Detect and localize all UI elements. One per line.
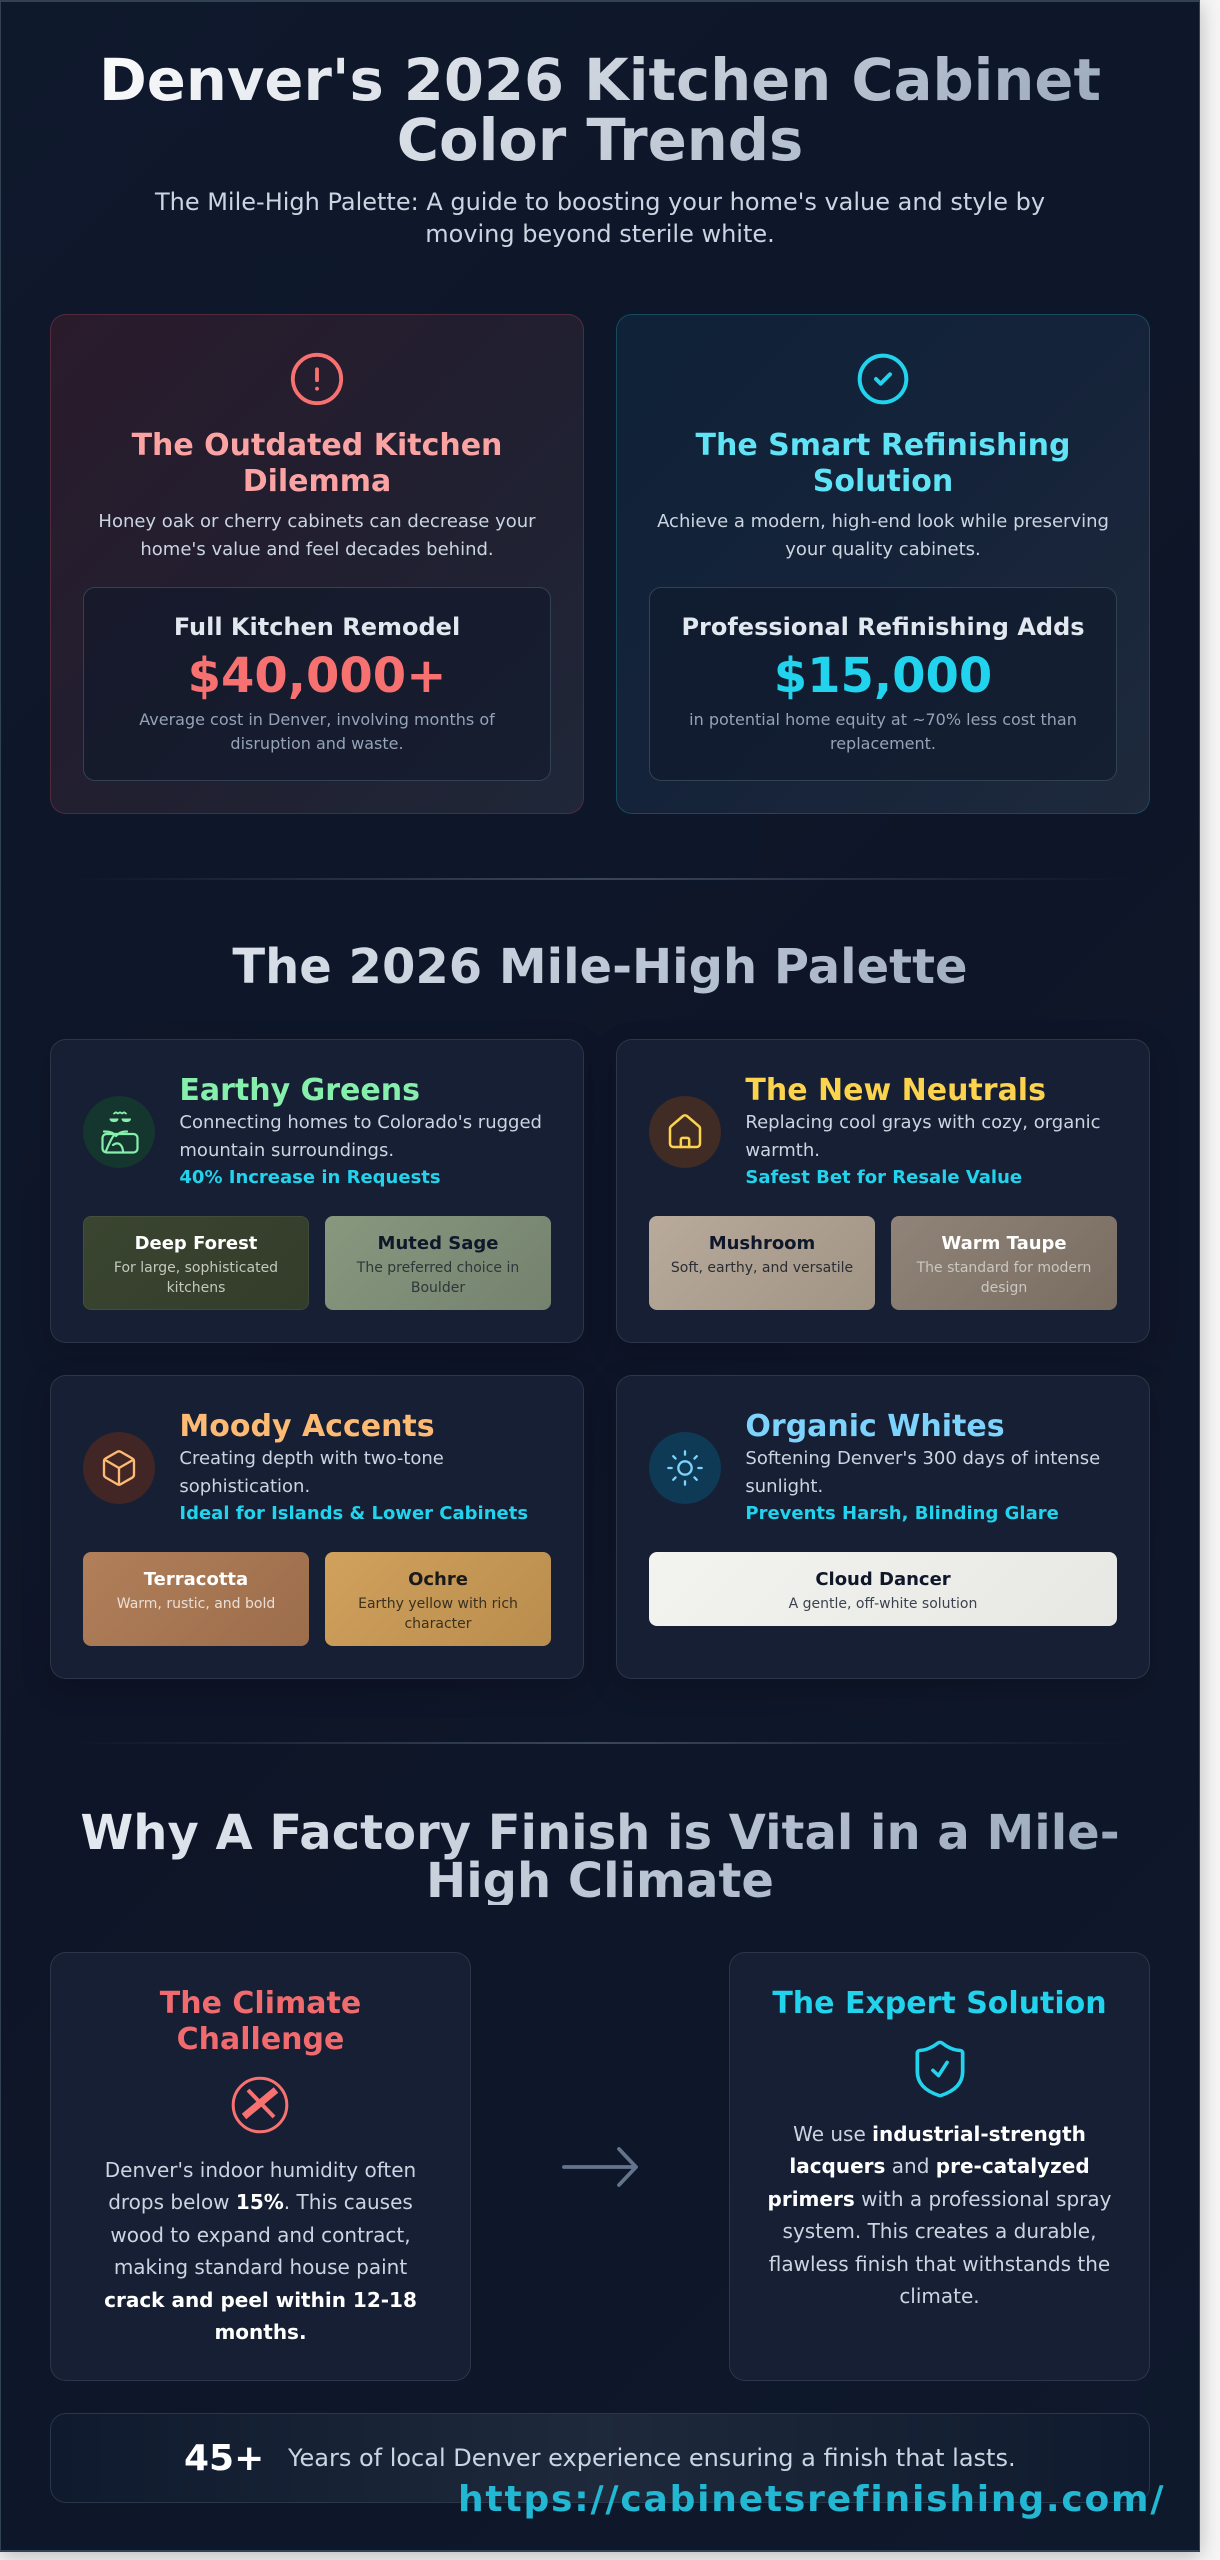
body text xyxy=(768,2122,1111,2308)
body text: primers with a professional spray xyxy=(768,2187,1111,2211)
heading: outdated kitchen: Dilemma xyxy=(243,464,391,498)
stat box: professional refinishing xyxy=(649,587,1117,781)
description xyxy=(179,1448,444,1496)
stat note xyxy=(689,710,1077,753)
heading: The Climate xyxy=(160,1986,361,2020)
panel: earthy greens xyxy=(50,1039,584,1343)
swatch note: Earthy yellow with rich xyxy=(358,1596,518,1612)
swatch: terracotta xyxy=(83,1552,309,1646)
description: outdated kitchen: Honey oak or cherry cabinets can decrease your xyxy=(98,511,536,532)
title: Denver's 2026 Kitchen Cabinet xyxy=(99,46,1101,114)
heading: smart refinishing: The Smart Refinishing xyxy=(696,428,1070,462)
description: Creating depth with two-tone xyxy=(179,1448,444,1468)
section heading: palette: The 2026 Mile-High Palette xyxy=(232,939,968,995)
description: sunlight. xyxy=(745,1476,823,1496)
swatch note xyxy=(356,1260,519,1296)
icon: shield check xyxy=(916,2040,964,2098)
body text: months. xyxy=(214,2320,307,2344)
body text: Denver's indoor humidity often xyxy=(105,2158,416,2182)
body text: lacquers and pre-catalyzed xyxy=(789,2154,1090,2178)
description xyxy=(179,1112,542,1160)
swatch: muted sage xyxy=(325,1216,551,1310)
swatch note: The preferred choice in xyxy=(357,1260,519,1276)
title: Color Trends xyxy=(397,106,803,174)
swatch note xyxy=(358,1596,518,1632)
title xyxy=(50,50,1150,170)
description: smart refinishing: Achieve a modern, high-end look while preserving xyxy=(657,511,1109,532)
stat note: replacement. xyxy=(830,734,936,753)
stat note: Average cost in Denver, involving months of xyxy=(139,710,495,729)
body text: drops below 15%. This causes xyxy=(108,2190,413,2214)
description: smart refinishing: your quality cabinets. xyxy=(785,539,981,560)
icon: crossed circle xyxy=(232,2076,288,2134)
heading: outdated kitchen: The Outdated Kitchen xyxy=(132,428,502,462)
body text xyxy=(104,2158,417,2344)
swatch note: Soft, earthy, and versatile xyxy=(671,1260,853,1276)
description: Softening Denver's 300 days of intense xyxy=(745,1448,1100,1468)
heading: Challenge xyxy=(177,2022,344,2056)
panel: climate challenge xyxy=(50,1952,471,2381)
swatch name: Deep Forest xyxy=(135,1233,257,1254)
panel: organic whites xyxy=(616,1375,1150,1679)
swatch note: For large, sophisticated xyxy=(114,1260,278,1276)
swatch note: kitchens xyxy=(167,1280,225,1296)
panel: new neutrals xyxy=(616,1039,1150,1343)
swatch note: A gentle, off-white solution xyxy=(789,1596,977,1612)
body text: climate. xyxy=(899,2284,980,2308)
subtitle xyxy=(154,188,1045,248)
description: outdated kitchen xyxy=(98,511,536,560)
stat number: 45+ xyxy=(184,2438,264,2478)
heading: The New Neutrals xyxy=(745,1072,1046,1108)
swatch note: design xyxy=(981,1280,1027,1296)
stat note: disruption and waste. xyxy=(230,734,404,753)
panel: moody accents xyxy=(50,1375,584,1679)
stat note xyxy=(139,710,496,753)
heading: Moody Accents xyxy=(179,1408,435,1444)
stat description: Years of local Denver experience ensuring a finish that lasts. xyxy=(288,2444,1016,2472)
swatch: cloud dancer xyxy=(649,1552,1117,1626)
swatch note: character xyxy=(404,1616,472,1632)
description: mountain surroundings. xyxy=(179,1140,394,1160)
description xyxy=(745,1112,1101,1160)
heading: smart refinishing: Solution xyxy=(813,464,953,498)
heading xyxy=(160,1986,361,2056)
swatch: deep forest xyxy=(83,1216,309,1310)
icon: house xyxy=(649,1096,721,1168)
arrow xyxy=(562,2147,638,2187)
swatch note: Boulder xyxy=(411,1280,465,1296)
stat note: in potential home equity at ~70% less cost than xyxy=(689,710,1077,729)
highlight: Safest Bet for Resale Value xyxy=(745,1167,1022,1188)
swatch note xyxy=(114,1260,278,1296)
swatch: ochre xyxy=(325,1552,551,1646)
stat value: $15,000 xyxy=(774,648,992,704)
section heading: factory finish: High Climate xyxy=(426,1853,774,1909)
body text: making standard house paint xyxy=(114,2255,407,2279)
heading: The Expert Solution xyxy=(772,1986,1107,2020)
swatch note: The standard for modern xyxy=(917,1260,1091,1276)
icon: alert circle xyxy=(290,352,344,406)
heading: smart refinishing xyxy=(696,428,1070,498)
swatch name: Ochre xyxy=(408,1569,468,1590)
highlight: Prevents Harsh, Blinding Glare xyxy=(745,1503,1059,1524)
body text: system. This creates a durable, xyxy=(783,2219,1096,2243)
description: Connecting homes to Colorado's rugged xyxy=(179,1112,542,1132)
swatch note: Warm, rustic, and bold xyxy=(117,1596,275,1612)
subtitle: The Mile-High Palette: A guide to boosting your home's value and style by xyxy=(155,188,1045,216)
description: smart refinishing xyxy=(657,511,1109,560)
description: sophistication. xyxy=(179,1476,310,1496)
highlight: Ideal for Islands & Lower Cabinets xyxy=(179,1503,528,1524)
stat box: full kitchen remodel xyxy=(83,587,551,781)
body text: wood to expand and contract, xyxy=(110,2223,411,2247)
body text: flawless finish that withstands the xyxy=(769,2252,1110,2276)
subtitle: moving beyond sterile white. xyxy=(425,220,775,248)
section heading: factory finish: Why A Factory Finish is Vital in a Mile- xyxy=(80,1805,1120,1861)
swatch: mushroom xyxy=(649,1216,875,1310)
stat value: $40,000+ xyxy=(188,648,446,704)
heading: Organic Whites xyxy=(745,1408,1005,1444)
website url: https://cabinetsrefinishing.com/ xyxy=(458,2479,1165,2520)
swatch name: Muted Sage xyxy=(378,1233,498,1254)
footer stat bar xyxy=(50,2413,1150,2503)
swatch name: Terracotta xyxy=(144,1569,248,1590)
section heading: factory finish xyxy=(50,1809,1150,1905)
description: outdated kitchen: home's value and feel decades behind. xyxy=(140,539,494,560)
body text: We use industrial-strength xyxy=(793,2122,1086,2146)
heading: outdated kitchen xyxy=(132,428,502,498)
icon: check circle xyxy=(858,354,908,404)
panel: outdated kitchen dilemma xyxy=(50,314,584,814)
panel: smart refinishing solution xyxy=(616,314,1150,814)
body text: crack and peel within 12-18 xyxy=(104,2288,417,2312)
swatch note xyxy=(916,1260,1091,1296)
icon: sun xyxy=(649,1432,721,1504)
swatch: warm taupe xyxy=(891,1216,1117,1310)
icon: earthy greens xyxy=(83,1096,155,1168)
description: Replacing cool grays with cozy, organic xyxy=(745,1112,1101,1132)
swatch name: Warm Taupe xyxy=(941,1233,1067,1254)
heading: Earthy Greens xyxy=(179,1072,420,1108)
stat label: Professional Refinishing Adds xyxy=(681,613,1085,641)
section heading: palette xyxy=(50,937,1150,997)
description: warmth. xyxy=(745,1140,820,1160)
swatch name: Mushroom xyxy=(709,1233,815,1254)
description xyxy=(745,1448,1100,1496)
panel: expert solution xyxy=(729,1952,1150,2381)
icon: box xyxy=(83,1432,155,1504)
swatch name: Cloud Dancer xyxy=(815,1569,951,1590)
highlight: 40% Increase in Requests xyxy=(179,1167,441,1188)
stat label: Full Kitchen Remodel xyxy=(174,613,460,641)
